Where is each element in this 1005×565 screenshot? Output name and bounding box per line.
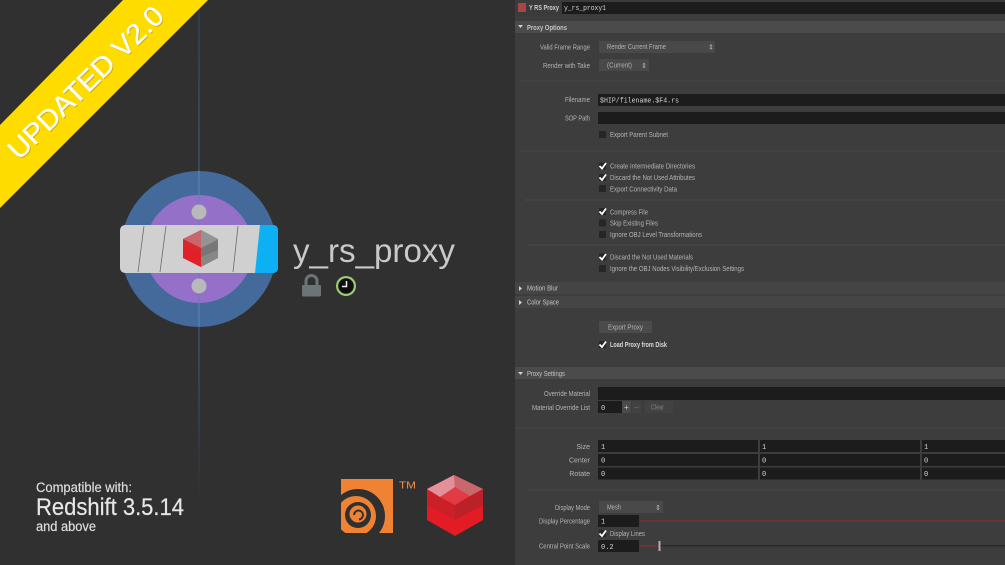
checkbox: discard not used attributes [599,174,695,182]
row: material override list: + [624,403,629,412]
row: center: 0 [924,458,928,466]
checkbox: load proxy from disk: Load Proxy from Disk [610,342,667,349]
checkbox: compress file: Compress File [610,210,648,216]
node title bar [515,0,1005,15]
icon: redshift logo [427,475,483,536]
row: render with take: ⇕ [641,62,647,70]
row: rotate: 0 [924,471,928,479]
row: override material [544,387,1005,400]
ribbon: updated v2.0 [0,0,208,208]
row: rotate: 0 [601,471,605,479]
row: size [576,440,1005,452]
row: display mode [555,501,663,513]
icon: redshift hexagon on node [183,230,218,267]
compatibility text [36,480,184,534]
checkbox: display lines [599,530,645,538]
icon: lock [302,276,321,296]
row: rotate [569,468,1005,480]
row: display percentage: Display Percentage [539,518,590,526]
checkbox: compress file [599,208,648,216]
houdini trademark: TM [399,480,416,492]
row: sop path [565,112,1005,124]
vertical wire line [198,0,200,495]
ribbon: updated v2.0: UPDATED V2.0 [2,0,170,165]
row: central point scale: Central Point Scale [539,544,590,550]
row: filename [565,94,1005,106]
row: override material: Override Material [544,391,590,398]
node flag dividers [138,226,238,272]
row: rotate: Rotate [569,471,590,478]
checkbox: discard not used materials: Discard the Not Used Materials [610,254,693,262]
row: display percentage: 1 [601,518,605,526]
section header: motion blur: Motion Blur [527,286,559,292]
compatibility text: Redshift 3.5.14 [36,494,184,521]
node blue flag [255,225,278,273]
checkbox: export connectivity data: Export Connectivity Data [610,186,677,194]
checkbox: export parent subnet [599,131,668,139]
checkbox: export connectivity data [599,185,677,194]
node title bar: y_rs_proxy1 [564,5,606,13]
checkbox: ignore obj level transformations: Ignore OBJ Level Transformations [610,232,702,239]
row: center: Center [569,458,591,464]
section header: color space: Color Space [527,300,559,306]
node body [120,225,278,273]
row: center: 0 [601,458,605,466]
row: valid frame range: Valid Frame Range [540,44,590,52]
checkbox: create intermediate directories: Create Intermediate Directories [610,164,695,170]
section header: proxy settings: Proxy Settings [527,371,565,378]
row: material override list: Clear [651,404,665,412]
row: valid frame range: ⇕ [708,44,714,52]
output connector dot [192,278,206,294]
separator [520,150,1005,152]
row: render with take [543,59,649,71]
button: export proxy: Export Proxy [608,324,643,332]
checkbox: export parent subnet: Export Parent Subnet [610,132,668,139]
ribbon: updated v2.0: UPDATED V2.0 [3,1,171,166]
row: display mode: ⇕ [655,504,661,512]
separator [524,199,1005,201]
row: display mode: Display Mode [555,505,590,512]
checkbox: display lines: Display Lines [610,531,645,538]
row: display mode: Mesh [607,504,621,512]
checkbox: discard not used materials [599,254,693,262]
compatibility text: Compatible with: [36,480,132,495]
section header: proxy settings [515,367,1005,379]
icon: houdini logo [341,479,393,533]
separator [528,244,1005,246]
checkbox: skip existing files [599,220,658,228]
row: filename: Filename [565,97,590,104]
checkbox: load proxy from disk [599,341,667,349]
separator [528,489,1005,491]
row: material override list [532,401,673,413]
separator [520,80,1005,82]
section header: proxy options [515,21,1005,33]
node name: y_rs_proxy [293,233,455,270]
row: valid frame range [540,41,715,53]
row: render with take: Render with Take [543,63,590,70]
row: center [569,454,1005,466]
row: central point scale: 0.2 [601,544,614,552]
row: size: Size [576,444,590,451]
row: render with take: (Current) [607,62,632,70]
checkbox: ignore obj nodes visibility: Ignore the OBJ Nodes Visibility/Exclusion Settings [610,266,744,273]
compatibility text: and above [36,519,96,534]
section header: color space [515,296,1005,308]
panel background [515,0,1005,565]
section header: motion blur [515,282,1005,294]
row: size: 1 [924,444,928,452]
node title bar: Y RS Proxy [529,5,559,12]
row: center: 0 [762,458,766,466]
input connector dot [192,204,206,220]
row: display percentage [539,515,1005,527]
row: valid frame range: Render Current Frame [607,44,666,51]
node outer blue circle [121,171,277,327]
separator [515,427,1005,429]
button: export proxy [599,321,652,333]
icon: clock [336,276,356,296]
row: material override list: 0 [601,405,605,413]
section header: proxy options: Proxy Options [527,25,567,32]
node wire overlay [198,171,200,327]
row: material override list: − [634,403,639,412]
row: size: 1 [601,444,605,452]
panel: parameter editor [515,0,1005,565]
row: filename: $HIP/filename.$F4.rs [600,98,679,106]
checkbox: discard not used attributes: Discard the Not Used Attributes [610,175,695,182]
row: material override list: Material Override List [532,405,590,412]
row: size: 1 [762,444,766,452]
checkbox: skip existing files: Skip Existing Files [610,220,658,228]
node graphic [120,171,278,327]
row: rotate: 0 [762,471,766,479]
row: central point scale [539,540,1005,552]
row: sop path: SOP Path [565,116,590,122]
node inner purple circle [145,195,253,303]
